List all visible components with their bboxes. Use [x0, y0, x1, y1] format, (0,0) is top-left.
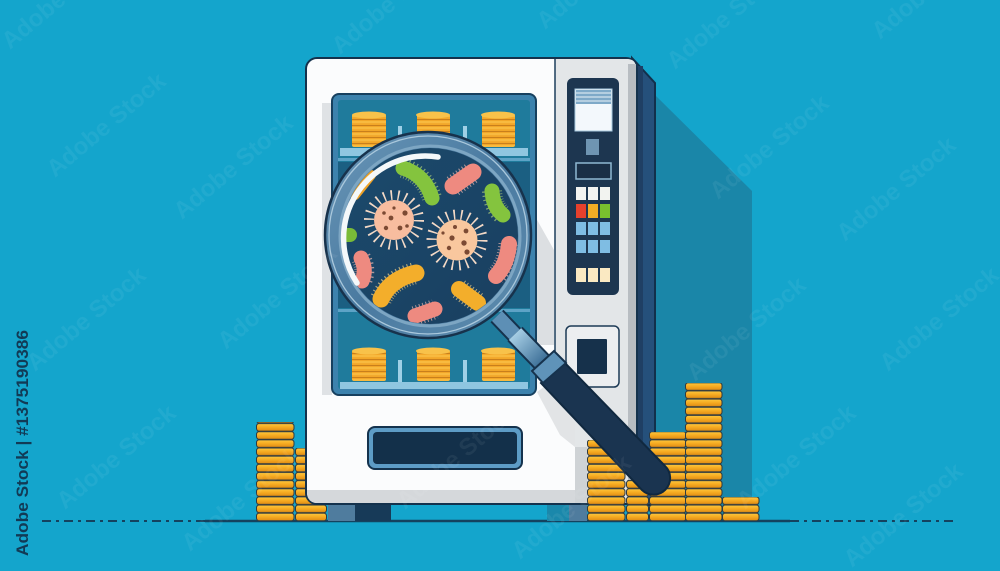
top shelf	[338, 126, 530, 161]
coloured buttons	[576, 204, 610, 218]
pink bacterium bottom	[415, 309, 435, 316]
machine side panel	[632, 58, 655, 505]
virus right	[432, 214, 482, 266]
yellow bacterium large	[381, 273, 416, 299]
green bacterium right	[492, 191, 503, 215]
green stub	[342, 228, 350, 242]
yellow bacterium small	[459, 289, 478, 303]
bottom shelf	[338, 309, 530, 389]
machine cast shadow	[655, 95, 752, 521]
right control column	[555, 59, 636, 503]
watermarks: Adobe Stock	[22, 261, 152, 377]
rim inner edge	[340, 146, 520, 326]
window coins: bottom row	[352, 348, 515, 381]
bottom shaded band	[307, 490, 587, 503]
machine feet	[328, 503, 587, 521]
watermarks: Adobe Stock	[213, 239, 343, 355]
lens glass	[342, 148, 518, 324]
coin stack: behind machine left	[295, 448, 327, 521]
lens highlight	[344, 156, 438, 283]
handle steel sleeve	[515, 334, 542, 362]
window shadow	[322, 103, 332, 395]
window coins: top row	[352, 112, 515, 147]
handle shadow on body	[537, 384, 575, 447]
pink bacterium right	[496, 244, 509, 276]
handle neck	[497, 316, 518, 338]
column divider	[554, 59, 556, 392]
rim highlight	[329, 136, 527, 334]
watermarks: Adobe Stock	[169, 109, 299, 225]
magnifier shadow on body	[536, 218, 554, 345]
watermarks: Adobe Stock	[52, 399, 182, 515]
ground line	[42, 520, 955, 522]
coin stack: tallest	[685, 383, 722, 521]
green bacterium top	[403, 168, 432, 198]
magnifying glass	[325, 132, 670, 495]
microbes	[342, 168, 509, 316]
lower column shade	[575, 447, 587, 503]
orange bacterium	[355, 175, 371, 195]
watermarks: Adobe Stock	[832, 131, 962, 247]
panel screen	[575, 89, 612, 131]
white buttons	[576, 187, 610, 200]
coin return box	[566, 326, 619, 387]
column edge shade	[628, 64, 636, 503]
watermarks: Adobe Stock	[177, 441, 307, 557]
coin stack: short right	[722, 497, 760, 521]
vending machine body	[306, 58, 637, 504]
stock id: Adobe Stock | #1375190386	[13, 330, 32, 556]
watermarks: Adobe Stock	[705, 89, 835, 205]
lens rim	[325, 132, 531, 338]
watermarks: Adobe Stock	[839, 457, 969, 571]
coin stack: far left	[256, 422, 294, 521]
display window with shelves	[332, 94, 536, 395]
watermarks: Adobe Stock	[507, 449, 637, 565]
pink bacterium left	[361, 258, 364, 281]
small indicator	[586, 139, 599, 155]
watermarks: Adobe Stock	[392, 399, 522, 515]
blue buttons	[576, 222, 610, 253]
coin stack: right 2	[626, 480, 649, 521]
control panel	[567, 78, 619, 295]
watermarks: Adobe Stock	[732, 399, 862, 515]
readout	[576, 163, 611, 179]
pickup slot	[368, 427, 522, 469]
coin stack: right 3	[649, 432, 686, 521]
handle collar	[532, 351, 566, 383]
coin stack: right 1	[587, 440, 626, 521]
watermarks: Adobe Stock	[682, 271, 812, 387]
watermarks: Adobe Stock	[42, 67, 172, 183]
handle grip	[541, 361, 670, 495]
pink bacterium top	[453, 172, 473, 186]
virus left	[369, 195, 419, 245]
cream buttons	[576, 268, 610, 282]
